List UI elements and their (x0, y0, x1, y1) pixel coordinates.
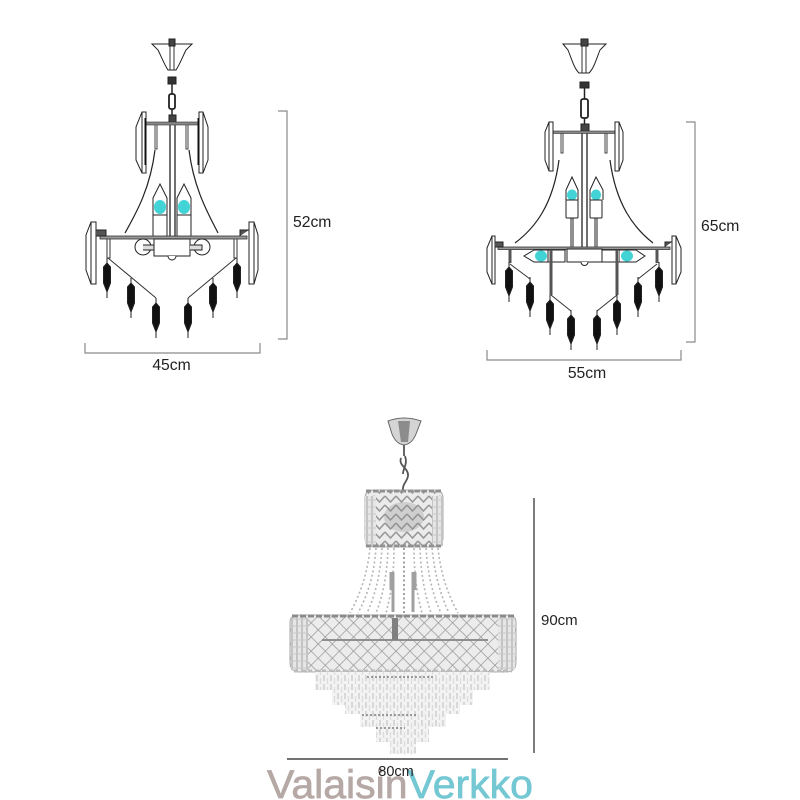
crystal tier 5 (376, 727, 429, 742)
posts (510, 250, 657, 295)
height bracket: 52cm (278, 111, 287, 339)
candle cluster (391, 572, 415, 612)
label: 80cm: 80cm (378, 764, 414, 780)
top crystal drum (365, 490, 443, 547)
crystal chandelier photo: 80cm x 90cm (290, 418, 516, 754)
pendant crystals (506, 262, 662, 350)
ceiling canopy (563, 39, 606, 73)
width line: 80cm (287, 758, 508, 760)
crystal tier 1 (315, 672, 490, 690)
crystal tier 2 (332, 690, 473, 705)
upper plate inner lines (146, 118, 198, 165)
crystal tier 6 (390, 742, 416, 754)
left frame curve (515, 160, 559, 243)
label: 45cm: 45cm (152, 357, 191, 374)
lower arm bar (100, 236, 247, 239)
upper right candle bulb (590, 177, 603, 247)
left frame curve (125, 150, 155, 233)
chain (168, 77, 176, 124)
right frame curve (189, 150, 218, 233)
upper left crystal plate (136, 112, 146, 173)
upper left crystal plate (545, 122, 553, 171)
upper right crystal plate (615, 122, 623, 171)
height line: 90cm (533, 498, 535, 753)
center hub (135, 239, 210, 260)
chain (580, 82, 589, 133)
upper left candle bulb (566, 177, 578, 247)
dark crystal details (362, 677, 434, 728)
upper arm bar (145, 122, 198, 125)
plate brackets (96, 230, 249, 236)
lower right crystal plate (672, 236, 681, 284)
right candle bulb (177, 184, 191, 237)
plate brackets (495, 242, 672, 247)
left horizontal bulb (524, 250, 565, 262)
label: 90cm: 90cm (541, 612, 578, 629)
center hub (567, 249, 602, 266)
central rod (170, 124, 175, 237)
label: 65cm: 65cm (701, 218, 739, 235)
upper arm hangers (155, 125, 188, 149)
canopy (388, 418, 421, 445)
width bracket: 45cm (85, 343, 260, 353)
upper hangers (561, 133, 607, 153)
lower posts and wires (107, 239, 237, 298)
lower right crystal plate (249, 222, 258, 284)
right frame curve (610, 160, 653, 243)
width bracket: 55cm (487, 350, 681, 360)
bead strands (350, 548, 458, 613)
chandelier drawing: 45cm x 52cm (86, 39, 258, 338)
chain (400, 445, 408, 491)
central rod (582, 133, 587, 248)
pendant crystals (104, 258, 240, 338)
label: 52cm: 52cm (293, 214, 331, 231)
left candle bulb (153, 184, 167, 237)
label: 55cm: 55cm (568, 365, 606, 382)
lower arm bar (498, 247, 670, 250)
wires (510, 264, 657, 311)
ceiling canopy (152, 39, 192, 70)
lower left crystal plate (487, 236, 495, 284)
right horizontal bulb (602, 250, 645, 262)
lower left crystal plate (86, 222, 96, 284)
main crystal drum (290, 615, 516, 672)
crystal tier 4 (360, 714, 446, 727)
height bracket: 65cm (686, 122, 695, 342)
upper right crystal plate (199, 112, 208, 173)
crystal tier 3 (345, 705, 460, 714)
upper arm bar (553, 131, 615, 134)
chandelier drawing: 55cm x 65cm (487, 39, 681, 350)
